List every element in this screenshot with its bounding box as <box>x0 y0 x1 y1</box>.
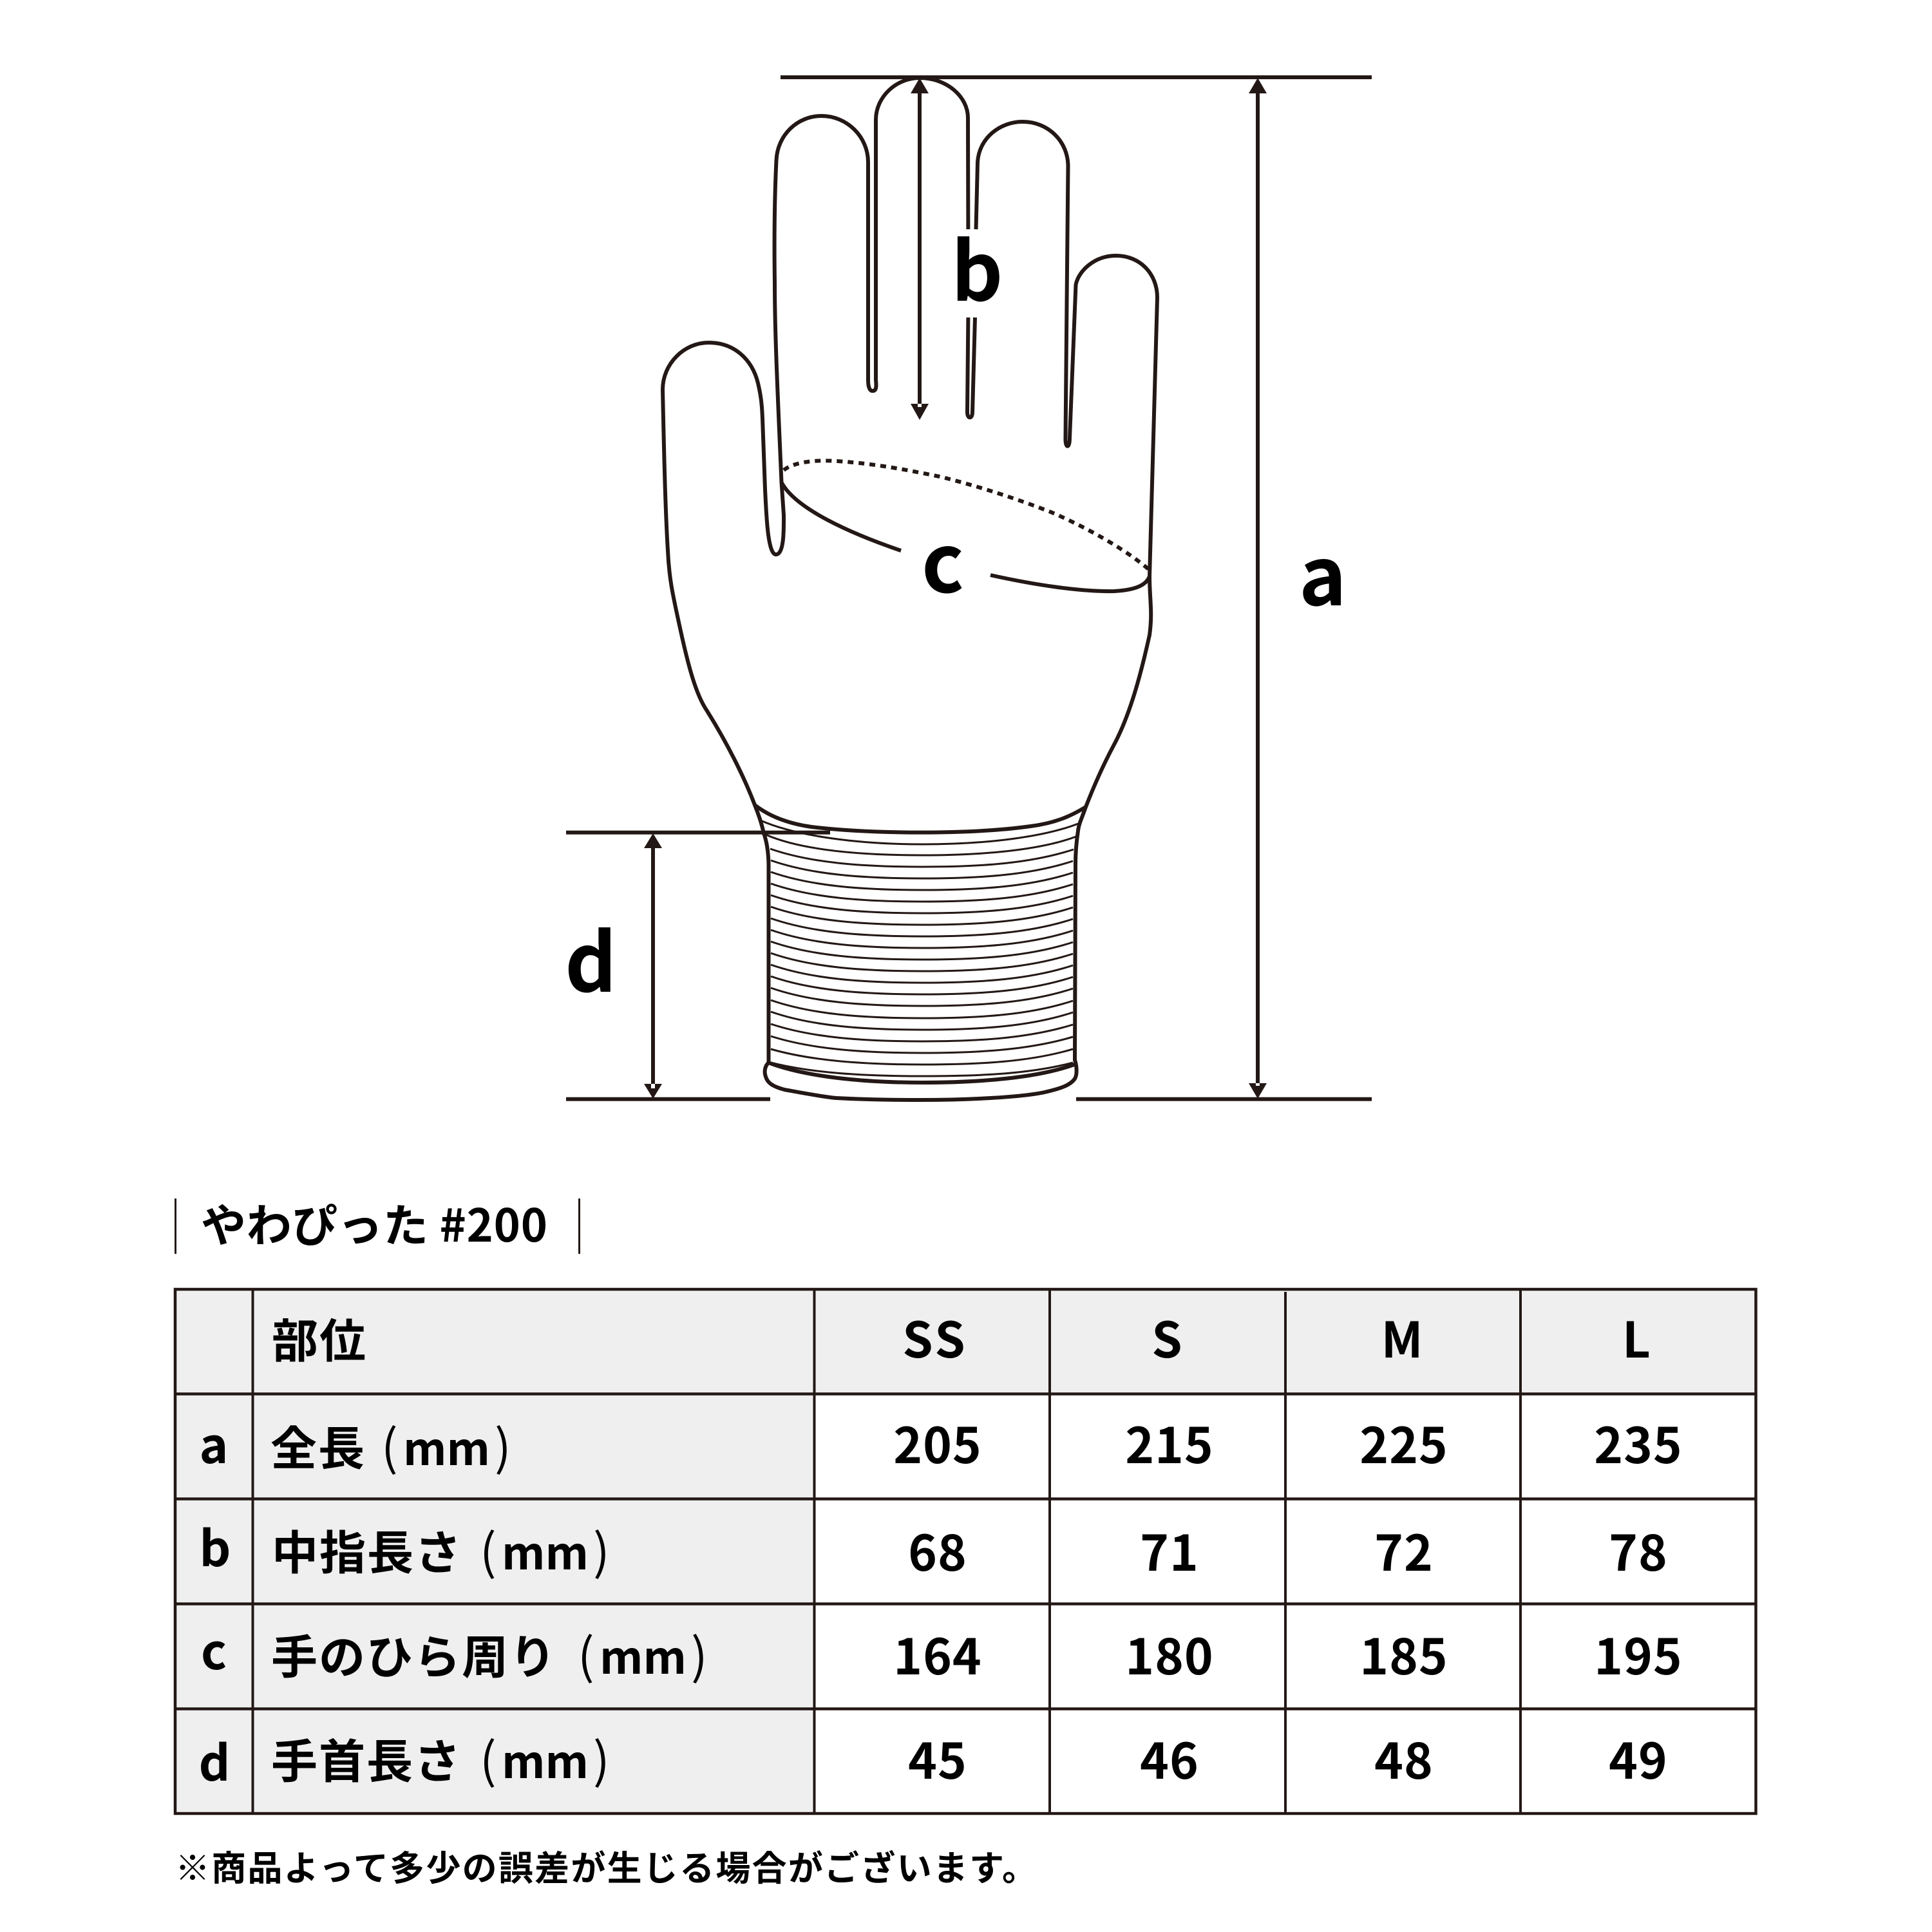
row b: 68 <box>908 1514 967 1585</box>
row d: 49 <box>1609 1722 1668 1793</box>
ribbed cuff lines <box>761 820 1078 1076</box>
table shaded cells <box>175 1289 1756 1814</box>
row b: 中指長さ <box>272 1515 462 1583</box>
bottom extension line d <box>566 1097 770 1101</box>
row b: mm <box>502 1518 589 1583</box>
title right bar <box>578 1198 580 1254</box>
row a <box>200 1406 1683 1479</box>
arrow b <box>911 78 929 420</box>
row b: 72 <box>1374 1514 1434 1585</box>
row d: d <box>199 1724 230 1795</box>
row d: 45 <box>908 1722 967 1793</box>
row a: 235 <box>1594 1406 1683 1477</box>
row c: 180 <box>1125 1618 1214 1689</box>
footnote: ※商品よって多少の誤差が生じる場合がございます。 <box>175 1840 1037 1891</box>
arrow d <box>644 833 662 1099</box>
row d: mm <box>502 1727 589 1792</box>
row c: ) <box>691 1617 708 1688</box>
header row: S <box>1151 1301 1185 1372</box>
row c <box>201 1613 1683 1689</box>
header row: M <box>1381 1301 1425 1372</box>
label b: b <box>951 207 1003 324</box>
row c: ( <box>578 1617 594 1688</box>
row a: 225 <box>1359 1406 1448 1477</box>
dimension d: wrist length <box>565 831 830 1101</box>
row a: 205 <box>893 1406 982 1477</box>
row c: 185 <box>1359 1618 1448 1689</box>
header row: SS <box>902 1301 968 1372</box>
title left bar <box>175 1198 176 1254</box>
product title <box>175 1190 580 1255</box>
header row: L <box>1622 1301 1653 1372</box>
size table <box>175 1289 1756 1814</box>
arrow a <box>1249 78 1267 1099</box>
row c: mm <box>600 1622 687 1687</box>
row a: mm <box>403 1414 490 1479</box>
row d <box>199 1721 1668 1795</box>
palm circumference dotted back curve <box>784 460 1149 569</box>
row b: 78 <box>1609 1514 1668 1585</box>
bottom extension line right <box>1076 1097 1372 1101</box>
row d: 48 <box>1374 1722 1434 1793</box>
cuff hem line <box>768 1063 1074 1083</box>
row d: ) <box>593 1721 610 1792</box>
row b: b <box>200 1510 231 1580</box>
row d: 手首長さ <box>271 1724 462 1792</box>
row c: c <box>201 1613 227 1683</box>
row b: ) <box>593 1513 610 1584</box>
row a: 全長 <box>270 1411 366 1479</box>
row a: a <box>200 1406 228 1477</box>
glove diagram <box>663 78 1157 1100</box>
row c: 195 <box>1594 1618 1683 1689</box>
header row <box>272 1301 1653 1372</box>
row b: 71 <box>1140 1514 1199 1585</box>
title text: やわぴった #200 <box>201 1190 547 1255</box>
glove outline <box>663 78 1157 1100</box>
table grid <box>175 1289 1756 1814</box>
row b <box>200 1510 1668 1585</box>
label a: a <box>1299 512 1347 629</box>
palm circumference front curve <box>782 482 1150 591</box>
row c: 164 <box>893 1618 982 1689</box>
label d: d <box>565 898 617 1015</box>
row d: ( <box>480 1721 497 1792</box>
row d: 46 <box>1140 1722 1199 1793</box>
wrist band top edge <box>755 805 1086 833</box>
top extension line <box>781 75 1372 79</box>
header row: 部位 <box>272 1303 367 1371</box>
row c: 手のひら周り <box>271 1620 557 1687</box>
row a: ) <box>495 1408 511 1479</box>
row a: ( <box>381 1408 398 1479</box>
row b: ( <box>480 1513 497 1584</box>
row a: 215 <box>1125 1406 1214 1477</box>
dimension a: overall length <box>781 75 1372 1101</box>
label c: palm circumference: c <box>922 499 964 616</box>
top extension line d <box>566 831 830 835</box>
dimension b: middle finger length <box>911 78 1003 420</box>
